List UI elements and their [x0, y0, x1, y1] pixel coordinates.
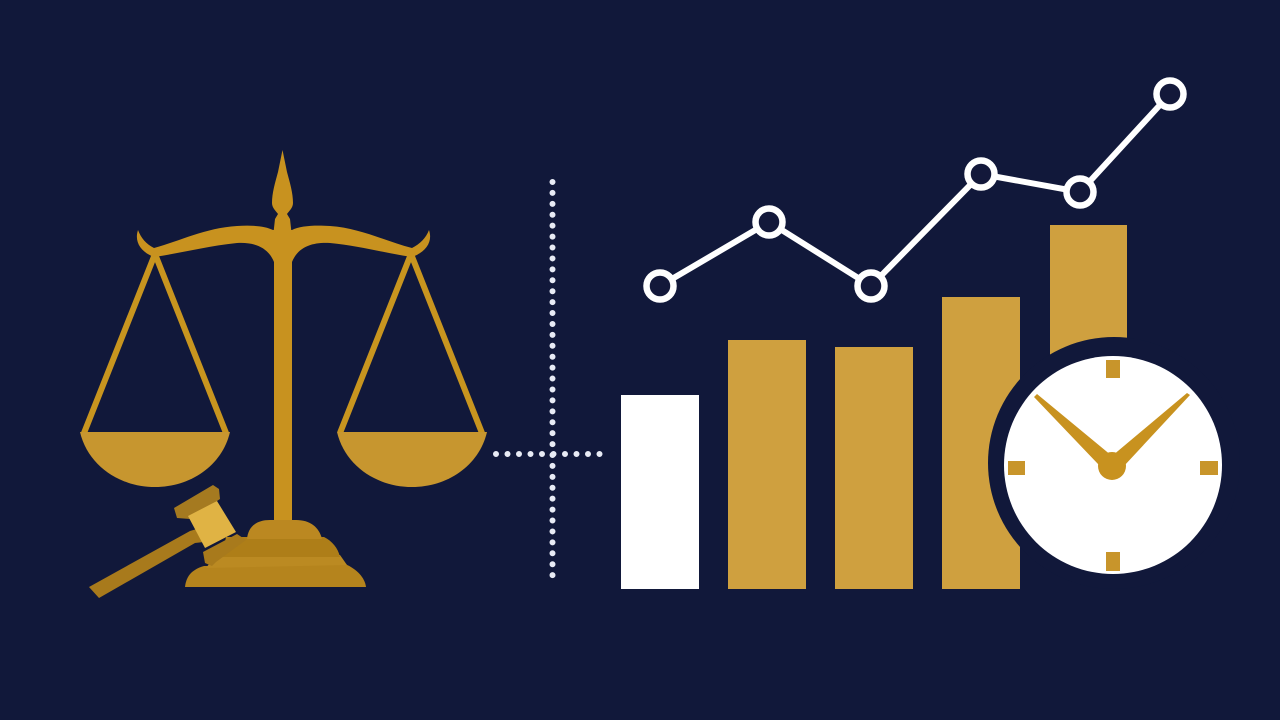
- clock hub: [1098, 452, 1126, 480]
- dotted horizontal divider: [496, 451, 602, 457]
- dotted vertical divider: [550, 182, 556, 580]
- hour ticks: [1008, 360, 1218, 571]
- bar chart: [621, 225, 1127, 589]
- data point 3: [858, 272, 884, 300]
- left pan strings: [84, 254, 226, 433]
- data point 1: [646, 272, 674, 300]
- trend line: [660, 94, 1170, 286]
- bar 1: [621, 395, 699, 589]
- icon: gavel: [89, 485, 246, 598]
- gavel lower cap: [203, 534, 246, 566]
- icon: scale base: [185, 520, 366, 587]
- gavel handle: [89, 528, 204, 598]
- central post: [274, 250, 292, 522]
- gavel head: [188, 501, 236, 548]
- right pan strings: [340, 254, 482, 433]
- data point 2: [756, 208, 782, 236]
- clock cut-out ring: [988, 337, 1240, 589]
- balance beam: [137, 226, 430, 262]
- gavel upper cap: [174, 485, 220, 519]
- right pan: [337, 432, 487, 487]
- bar 2: [728, 340, 806, 589]
- bar 4: [942, 297, 1020, 589]
- data point 5: [1066, 178, 1094, 206]
- finial: [272, 150, 293, 236]
- icon: clock: [988, 337, 1240, 589]
- base second tier: [222, 537, 340, 557]
- base top tier: [247, 520, 322, 539]
- base third tier: [206, 555, 347, 568]
- clock face: [1004, 356, 1222, 574]
- data point 6: [1156, 80, 1184, 108]
- bar 5: [1050, 225, 1127, 365]
- clock hands: [1034, 393, 1190, 476]
- base bottom tier: [185, 564, 366, 587]
- data point 4: [968, 160, 994, 188]
- bar 3: [835, 347, 913, 589]
- line chart: [646, 80, 1184, 300]
- icon: scales of justice: [80, 150, 487, 522]
- left pan: [80, 432, 230, 487]
